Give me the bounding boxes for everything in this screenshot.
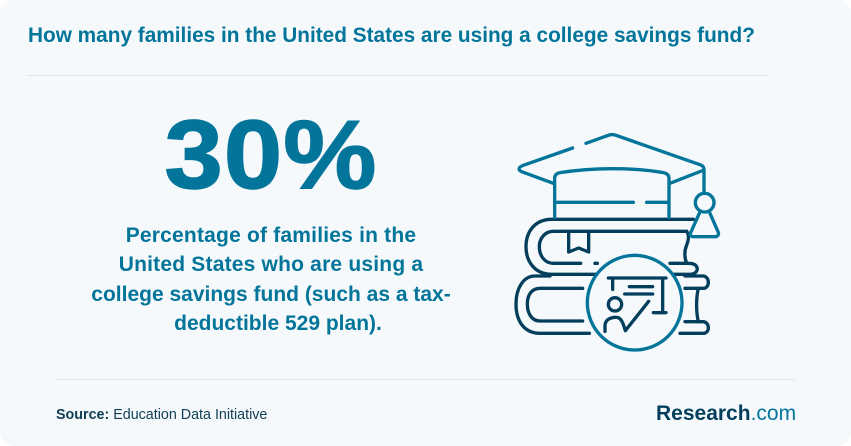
icon: teacher badge xyxy=(587,255,682,350)
description text: deductible 529 plan). xyxy=(174,312,382,335)
description text: United States who are using a xyxy=(119,253,423,276)
icon: graduation cap xyxy=(519,135,719,237)
description text: college savings fund (such as a tax- xyxy=(91,283,451,306)
description text xyxy=(91,224,451,335)
icon: graduation cap on books with teacher badge xyxy=(514,132,720,352)
big stat: 30%: 30% xyxy=(165,100,377,209)
title: How many families in the United States are using a college savings fund? xyxy=(28,24,755,47)
logo: Research.com: Research.com xyxy=(656,402,796,425)
source line: Source: Education Data Initiative xyxy=(56,407,267,423)
icon: books xyxy=(516,219,708,333)
description text: Percentage of families in the xyxy=(126,224,416,247)
